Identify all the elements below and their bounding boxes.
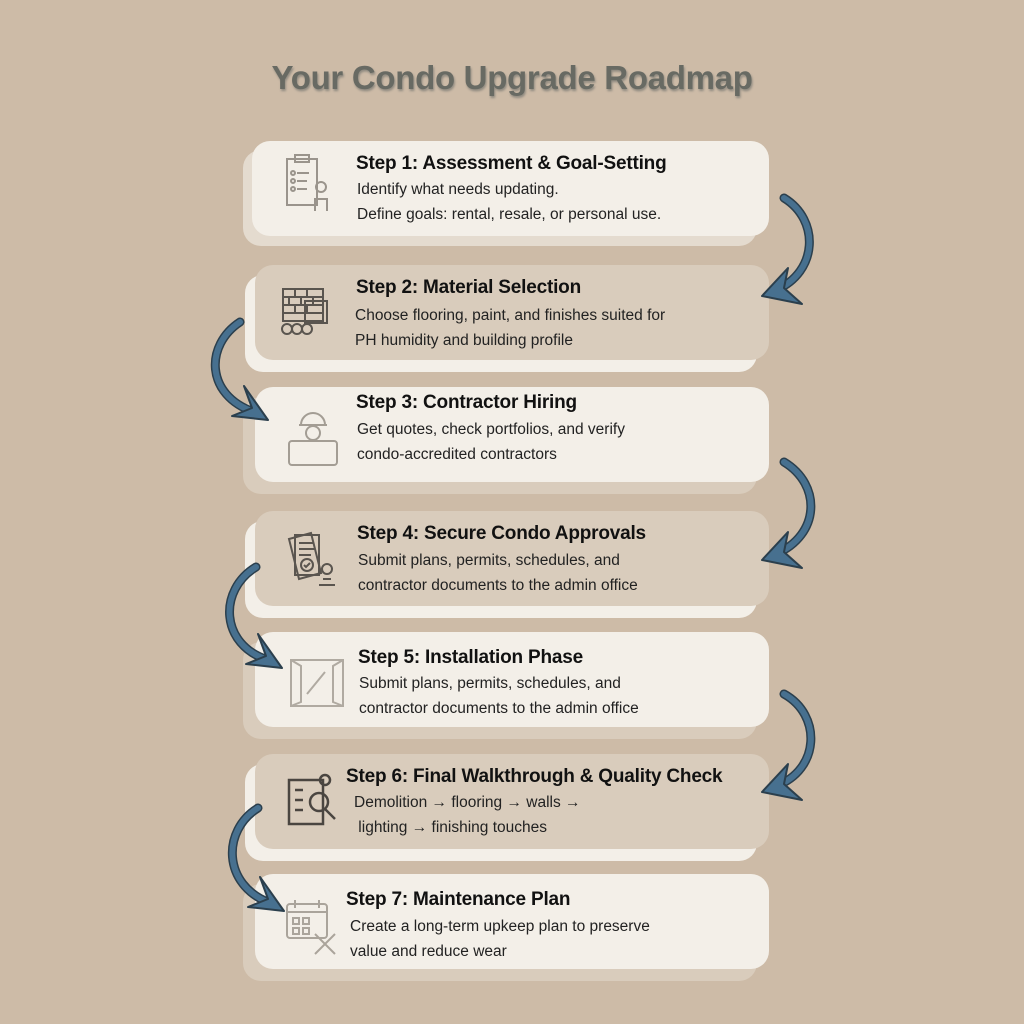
panel: step 2 — [245, 265, 769, 372]
panel: step 2: PH humidity and building profile — [355, 332, 573, 349]
panel: step 3: Step 3: Contractor Hiring — [356, 392, 577, 413]
panel: step 4 — [245, 511, 769, 618]
panel: step 5: Step 5: Installation Phase — [358, 647, 583, 668]
panel: step 5: Submit plans, permits, schedules, and — [359, 675, 621, 692]
panel: step 1: Step 1: Assessment & Goal-Setting — [356, 153, 666, 174]
panel: step 6: lighting → finishing touches — [358, 819, 547, 836]
panel: step 6: Step 6: Final Walkthrough & Quality Check — [346, 766, 722, 787]
panel: step 7: value and reduce wear — [350, 943, 507, 960]
panel: step 3 — [243, 387, 769, 494]
panel: step 4: Step 4: Secure Condo Approvals — [357, 523, 646, 544]
icon: materials — [281, 288, 328, 335]
panel: step 7: Step 7: Maintenance Plan — [346, 889, 570, 910]
panel: step 6 — [245, 754, 769, 861]
panel: step 3: Get quotes, check portfolios, and verify — [357, 421, 625, 438]
panel: step 1: Define goals: rental, resale, or personal use. — [357, 206, 661, 223]
panel: step 1 — [243, 141, 769, 246]
panel: step 4: Submit plans, permits, schedules, and — [358, 552, 620, 569]
icon: window tools — [290, 659, 344, 707]
panel: step 7: Create a long-term upkeep plan to preserve — [350, 918, 650, 935]
panel: step 5 — [243, 632, 769, 739]
title: Your Condo Upgrade Roadmap — [271, 59, 753, 96]
panel: step 4: contractor documents to the admin office — [358, 577, 638, 594]
icon: clipboard — [286, 154, 328, 211]
panel: step 2: Choose flooring, paint, and finishes suited for — [355, 307, 665, 324]
panel: step 7 — [243, 874, 769, 981]
icon: checklist magnifier — [288, 774, 336, 826]
icon: contractor — [288, 412, 338, 466]
panel: step 1: Identify what needs updating. — [357, 181, 559, 198]
panel: step 3: condo-accredited contractors — [357, 446, 557, 463]
panel: step 2: Step 2: Material Selection — [356, 277, 581, 298]
icon: calendar tools — [286, 900, 336, 955]
panel: step 6: Demolition → flooring → walls → — [354, 794, 581, 811]
panel: step 5: contractor documents to the admin office — [359, 700, 639, 717]
icon: approval documents — [288, 532, 335, 586]
